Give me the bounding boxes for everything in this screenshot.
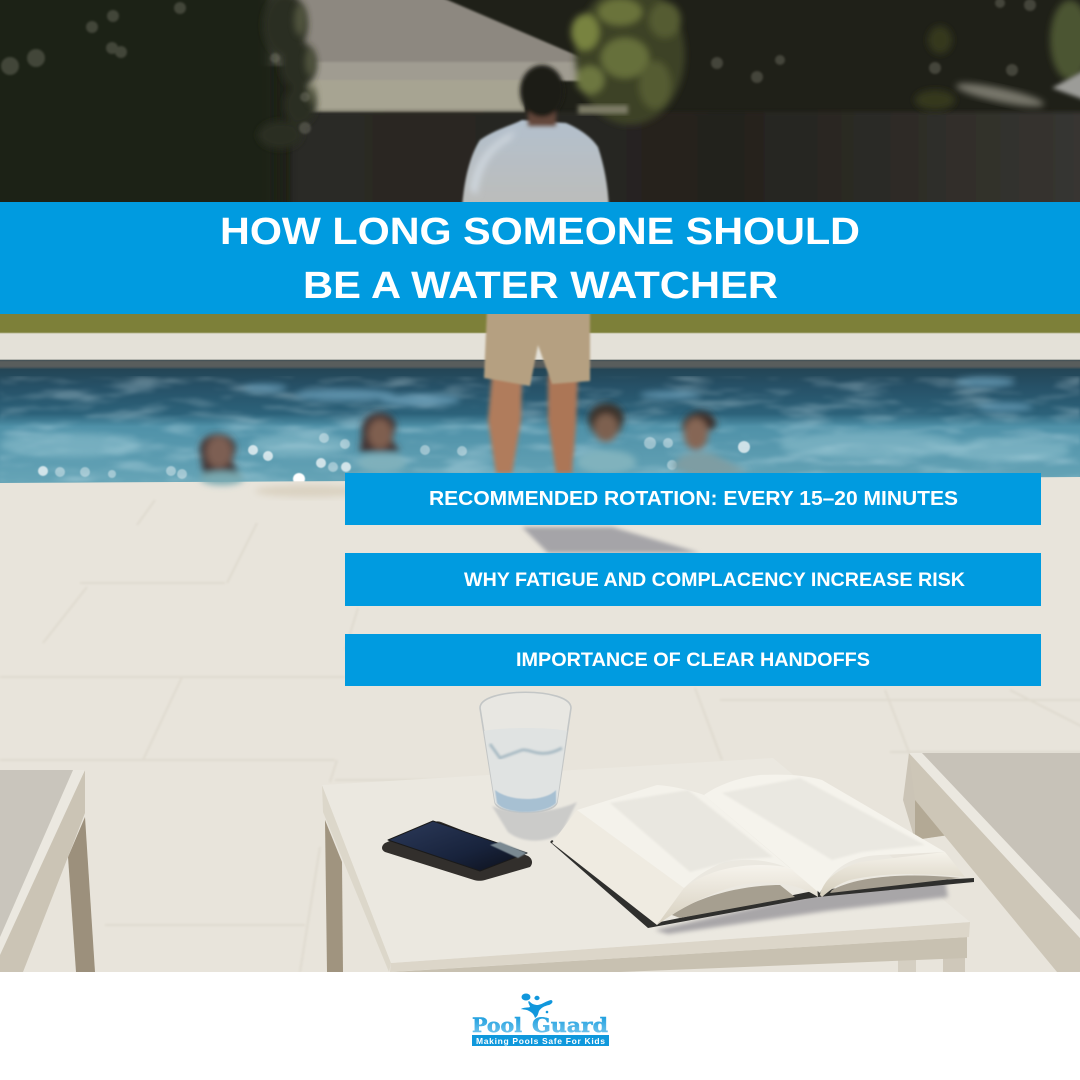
callout: recommended rotation: RECOMMENDED ROTATION: EVERY 15–20 MINUTES: [429, 488, 958, 510]
lounger frame top: [909, 753, 1080, 938]
book shadow on table: [655, 880, 948, 934]
lounger far leg: [903, 754, 944, 839]
glass caustic shadow: [492, 802, 577, 841]
pool water: [0, 360, 1080, 488]
callout: clear handoffs: IMPORTANCE OF CLEAR HANDOFFS: [516, 650, 870, 671]
right page text: [722, 778, 925, 860]
title text: BE A WATER WATCHER: [303, 265, 778, 307]
background: fence: [290, 112, 1080, 212]
title banner: [0, 202, 1080, 314]
man: head: [520, 65, 564, 126]
logo tagline bar: [472, 1035, 609, 1046]
icon: water splash: [521, 994, 552, 1018]
book cover: [550, 840, 974, 928]
man: shirt: [462, 120, 609, 208]
deck: [0, 477, 1080, 972]
callout: fatigue and complacency: [345, 553, 1041, 606]
background: bokeh highlights: [1, 0, 1036, 134]
lounger seat: [922, 753, 1080, 920]
footer white strip: [0, 972, 1080, 1080]
left page block: [552, 810, 684, 925]
shadow of man on deck: [522, 527, 700, 553]
left page text: [610, 790, 773, 872]
background: pool coping: [0, 333, 1080, 362]
background: dark base: [264, 0, 1080, 202]
right page block: [820, 852, 965, 897]
open book: [550, 775, 974, 928]
lounger frame top: [0, 770, 85, 955]
smartphone: [382, 821, 532, 881]
children in the pool: [200, 403, 748, 485]
glass water: [484, 728, 567, 810]
lounger frame side: [909, 753, 1080, 972]
right lounge chair: [903, 753, 1080, 972]
table side: [322, 785, 391, 972]
logo tagline: Making Pools Safe For Kids: [476, 1036, 605, 1046]
callout: clear handoffs: [345, 634, 1041, 686]
background: lawn: [0, 314, 1080, 334]
side table: [322, 758, 970, 972]
lounger frame side: [0, 770, 85, 975]
man standing at pool edge: [462, 65, 609, 474]
book dark underside: [672, 885, 795, 918]
lounger leg: [68, 817, 95, 972]
left page: [577, 785, 818, 892]
lounger seat: [0, 770, 73, 937]
logo: Pool Guard: [472, 994, 609, 1046]
background: left tree: [256, 0, 322, 152]
man: shorts: [484, 310, 590, 386]
callout: recommended rotation: [345, 473, 1041, 525]
logo wordmark: Pool: [472, 1013, 522, 1037]
right page: [704, 775, 945, 893]
table legs: [325, 820, 343, 972]
table front edge: [390, 922, 970, 972]
logo wordmark: Guard: [532, 1013, 608, 1037]
glass body: [480, 692, 571, 812]
left lounge chair: [0, 770, 95, 975]
man: legs: [488, 375, 578, 474]
drinking glass: [480, 692, 577, 841]
background: right tree foliage: [571, 0, 1080, 125]
background: house: [258, 0, 592, 113]
table top: [388, 778, 740, 782]
callout: fatigue and complacency: WHY FATIGUE AND COMPLACENCY INCREASE RISK: [464, 570, 965, 591]
title text: HOW LONG SOMEONE SHOULD: [220, 211, 860, 253]
